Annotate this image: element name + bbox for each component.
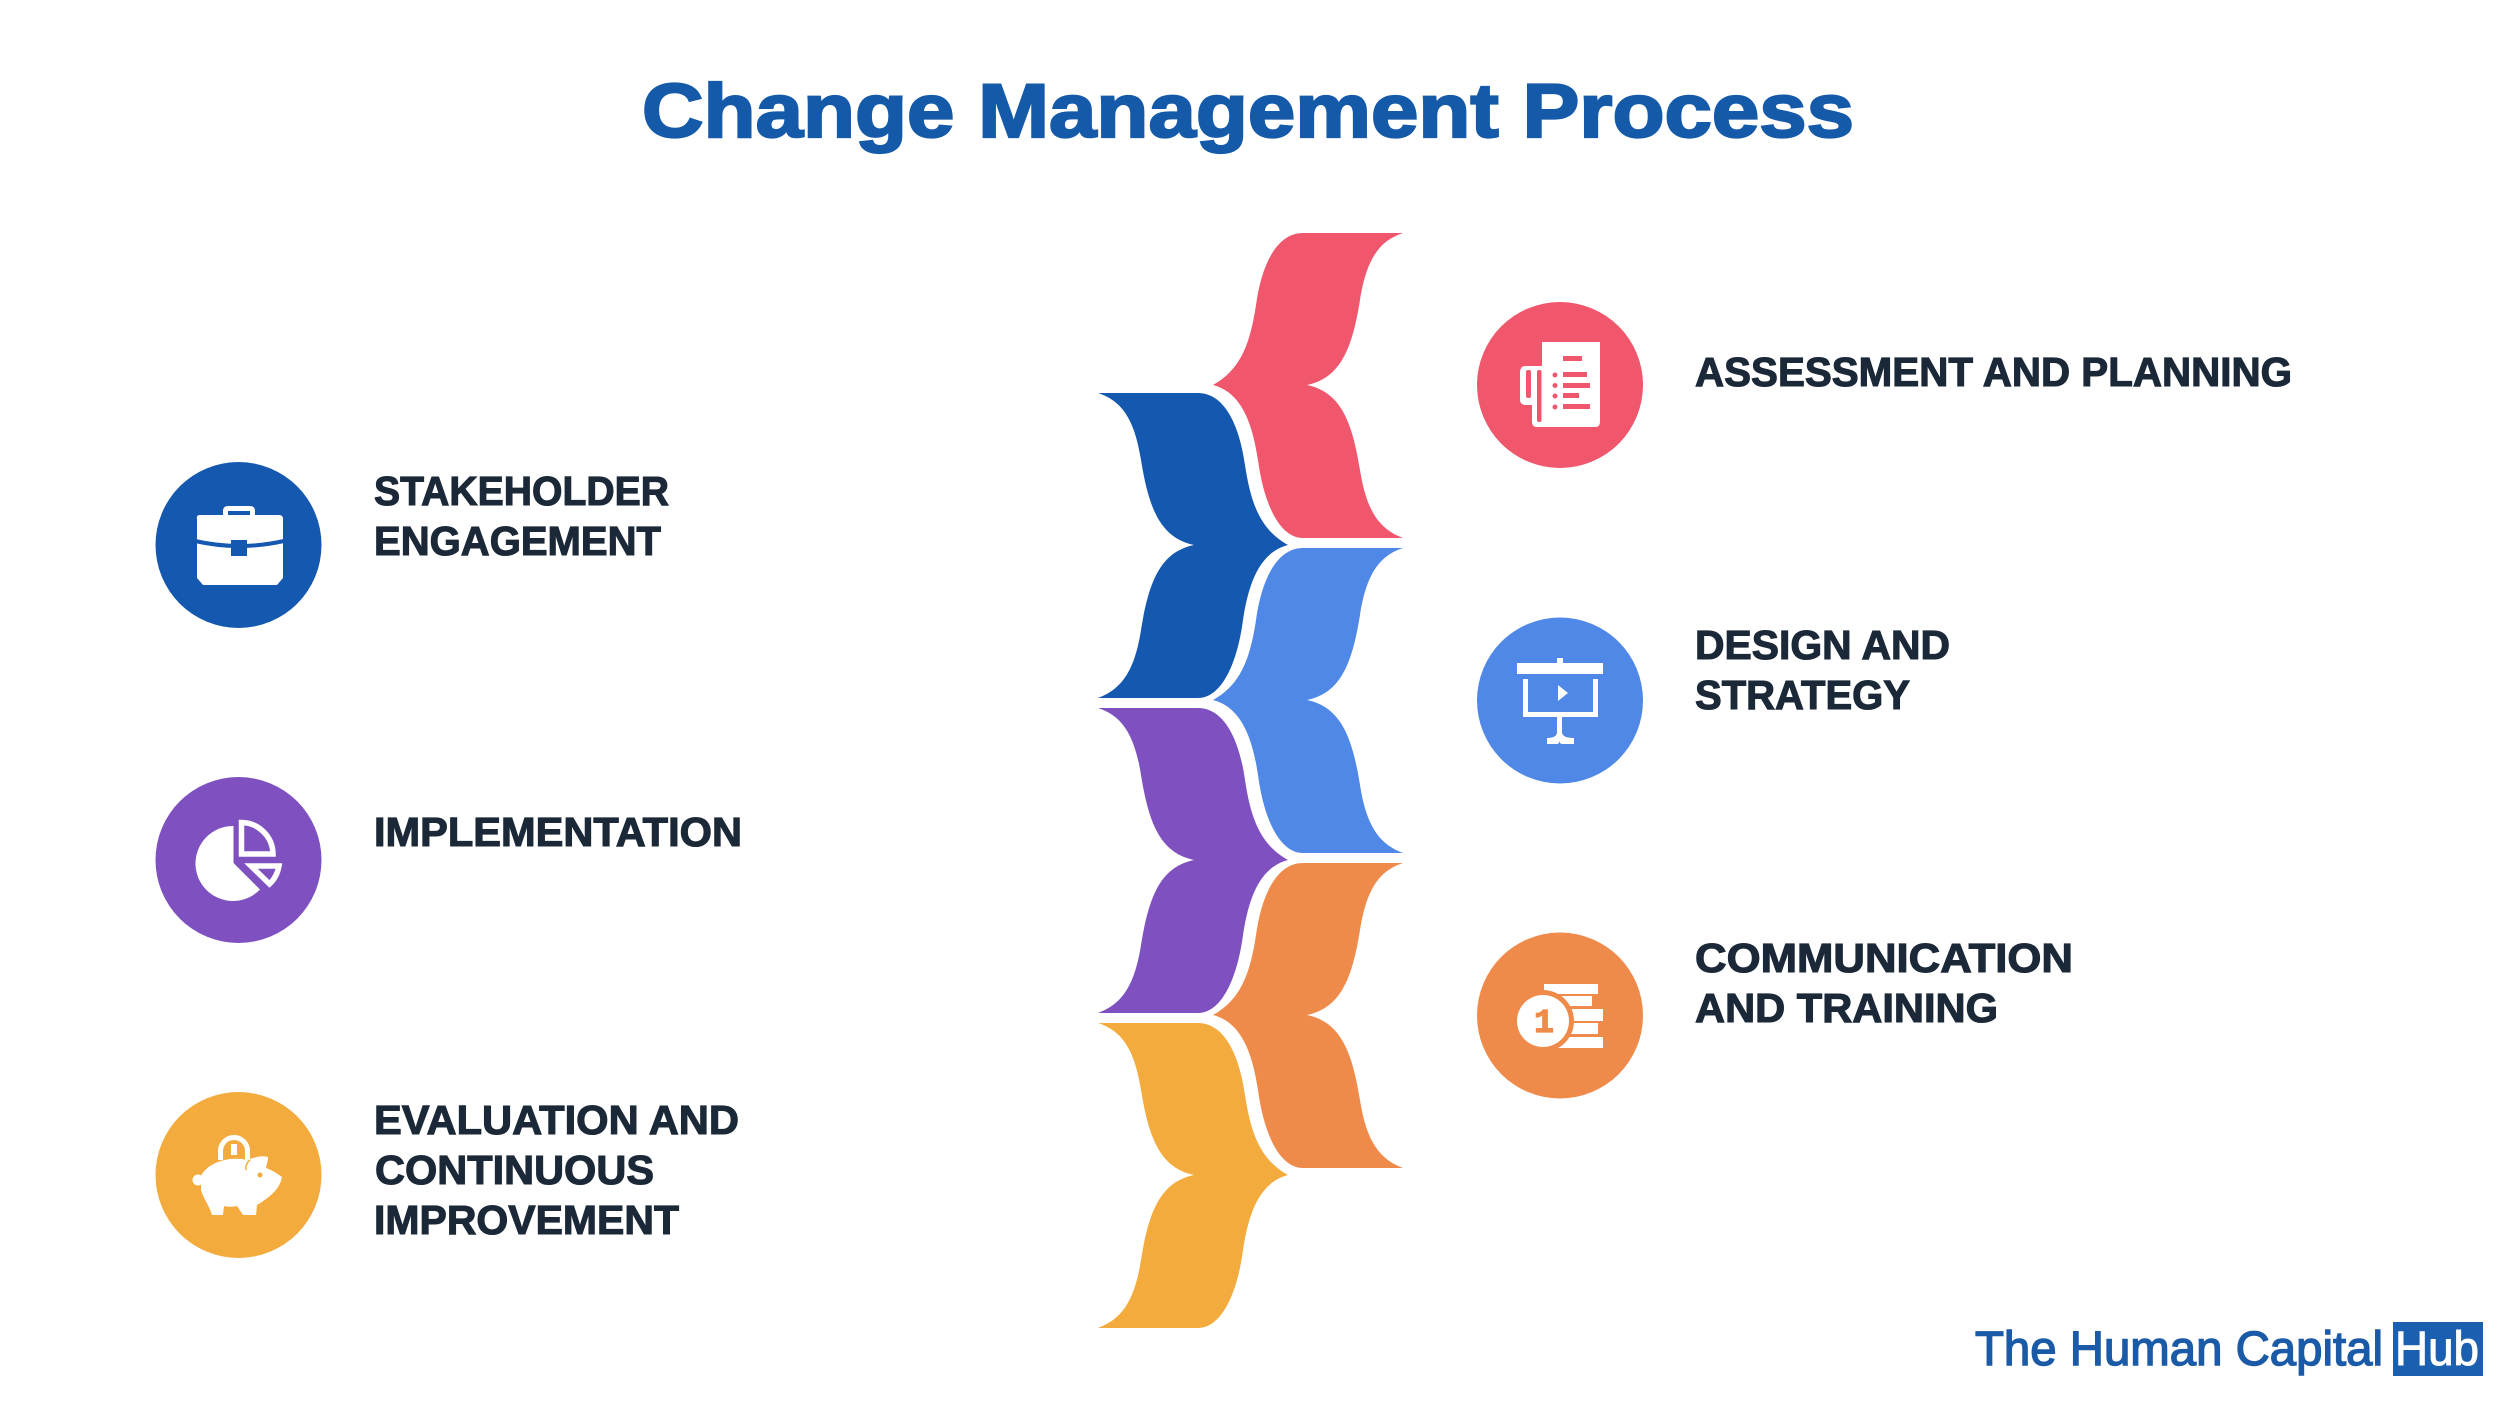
- label: DESIGN AND: [1695, 622, 1950, 668]
- wave: stakeholder engagement: [1098, 393, 1288, 698]
- label: IMPLEMENTATION: [374, 809, 742, 855]
- wave: communication and training: [1213, 863, 1403, 1168]
- label: STAKEHOLDER: [374, 468, 669, 514]
- step: assessment and planning: [1477, 302, 2292, 468]
- icon: pie chart: [156, 777, 322, 943]
- step: evaluation and continuous improvement: [156, 1092, 739, 1258]
- wave: evaluation and continuous improvement: [1098, 1023, 1288, 1328]
- label: COMMUNICATION: [1695, 935, 2073, 981]
- label: ENGAGEMENT: [374, 518, 661, 564]
- step: stakeholder engagement: [156, 462, 669, 628]
- label: ASSESSMENT AND PLANNING: [1695, 349, 2292, 395]
- step: design and strategy: [1477, 618, 1950, 784]
- logo: The Human Capital Hub: Hub: [2395, 1323, 2479, 1376]
- icon: briefcase: [156, 462, 322, 628]
- title: Change Management Process: [642, 69, 1854, 154]
- logo: The Human Capital Hub: The Human Capital: [1975, 1323, 2383, 1376]
- step: communication and training: [1477, 932, 2073, 1098]
- interlocking wave chain: [1098, 233, 1403, 1328]
- icon: coin stack: [1477, 932, 1643, 1098]
- icon: piggy bank: [156, 1092, 322, 1258]
- wave: implementation: [1098, 708, 1288, 1013]
- icon: document with pen: [1477, 302, 1643, 468]
- label: [374, 1097, 739, 1243]
- label: IMPROVEMENT: [374, 1197, 679, 1243]
- label: EVALUATION AND: [374, 1097, 739, 1143]
- label: STRATEGY: [1695, 672, 1910, 718]
- label: [374, 468, 669, 564]
- wave: assessment and planning: [1213, 233, 1403, 538]
- label: AND TRAINING: [1695, 985, 1998, 1031]
- label: [1695, 935, 2073, 1031]
- step: implementation: [156, 777, 742, 943]
- icon: presentation screen: [1477, 618, 1643, 784]
- label: CONTINUOUS: [375, 1147, 654, 1193]
- label: [1695, 622, 1950, 718]
- wave: design and strategy: [1213, 548, 1403, 853]
- icon: coin stack: 1: [1534, 1005, 1554, 1042]
